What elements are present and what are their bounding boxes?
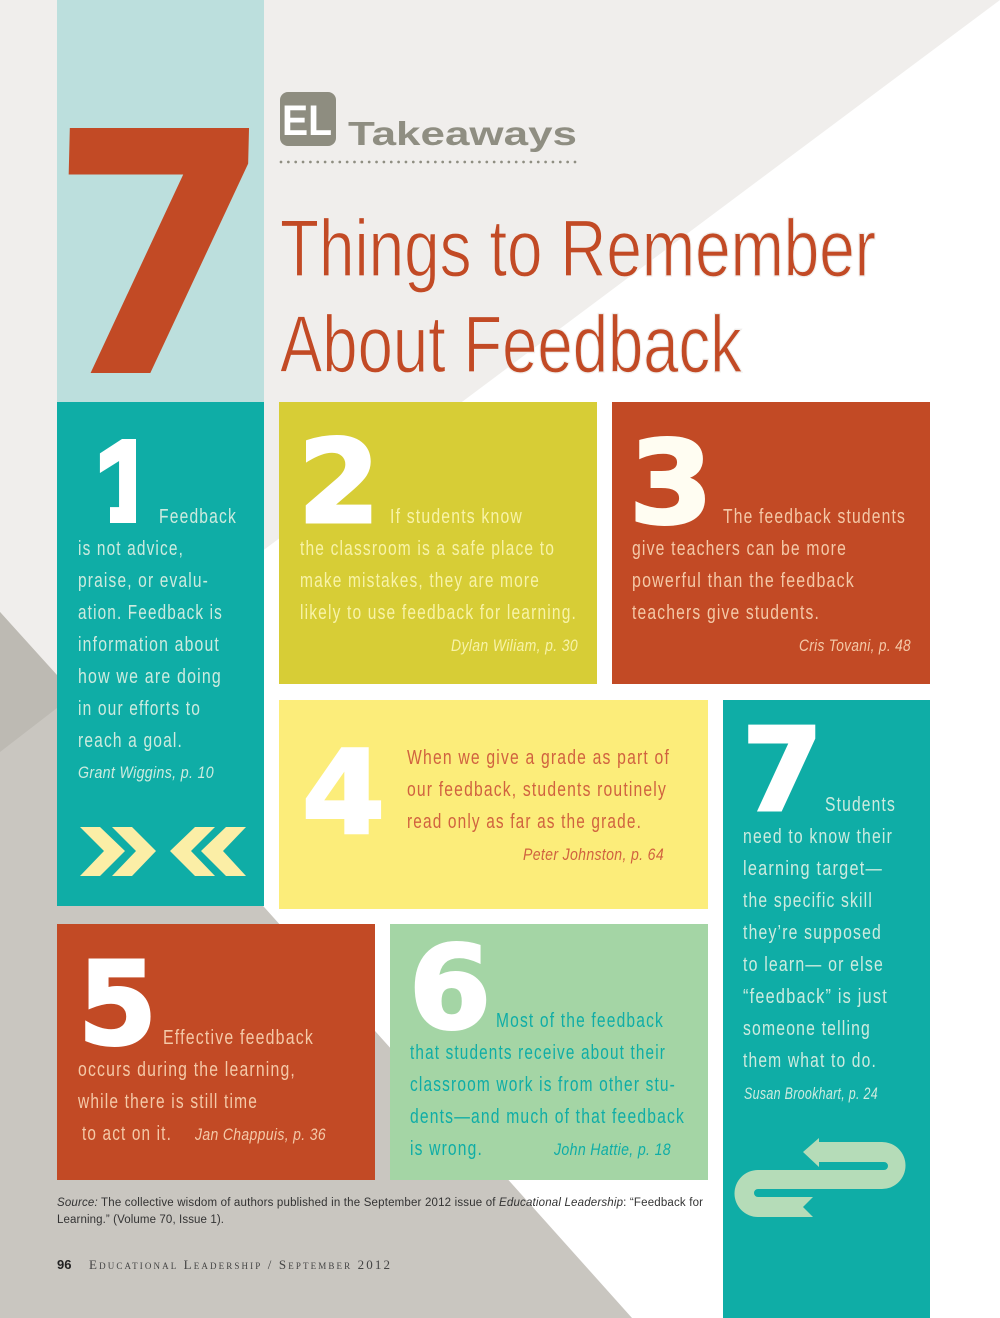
panel: takeaway 4: Peter Johnston, p. 64 xyxy=(523,845,664,864)
icon: converging chevrons xyxy=(80,827,246,876)
panel: takeaway 1: reach a goal. xyxy=(78,730,183,752)
panel: takeaway 1: information about xyxy=(78,634,220,656)
panel: takeaway 3: Cris Tovani, p. 48 xyxy=(799,636,911,655)
panel: takeaway 1 xyxy=(57,402,264,906)
logo: EL Takeaways xyxy=(280,92,577,162)
panel: takeaway 7: to learn— or else xyxy=(743,954,884,976)
title xyxy=(280,204,876,390)
panel: takeaway 5: Jan Chappuis, p. 36 xyxy=(194,1125,326,1144)
panel: takeaway 2: If students know xyxy=(390,506,523,528)
panel: takeaway 5: occurs during the learning, xyxy=(78,1059,296,1081)
panel: takeaway 2: 2 xyxy=(298,416,380,550)
panel: takeaway 7: them what to do. xyxy=(743,1050,877,1072)
title: About Feedback xyxy=(280,300,742,390)
panel: takeaway 4: When we give a grade as part of xyxy=(407,747,670,769)
panel: takeaway 7 xyxy=(723,700,930,1318)
panel: takeaway 3: The feedback students xyxy=(723,506,906,528)
large numeral 7: 7 xyxy=(40,62,277,453)
panel: takeaway 7: they’re supposed xyxy=(743,922,882,944)
panel: takeaway 7: Susan Brookhart, p. 24 xyxy=(744,1084,878,1103)
panel: takeaway 1: ation. Feedback is xyxy=(78,602,223,624)
source note xyxy=(57,1197,703,1226)
panel: takeaway 5: Effective feedback xyxy=(163,1027,314,1049)
panel: takeaway 1: Grant Wiggins, p. 10 xyxy=(78,763,214,782)
logo: EL Takeaways: EL xyxy=(282,97,332,145)
panel: takeaway 7: the specific skill xyxy=(743,890,873,912)
panel: takeaway 2 xyxy=(279,402,597,684)
panel: takeaway 4: read only as far as the grade. xyxy=(407,811,642,833)
panel: takeaway 7: Students xyxy=(825,794,896,816)
panel: takeaway 2: likely to use feedback for learning. xyxy=(300,602,577,624)
panel: takeaway 4: 4 xyxy=(302,727,385,861)
panel: takeaway 6: Most of the feedback xyxy=(496,1010,664,1032)
panel: takeaway 1: in our efforts to xyxy=(78,698,201,720)
panel: takeaway 5: while there is still time xyxy=(77,1091,258,1113)
panel: takeaway 3: powerful than the feedback xyxy=(632,570,855,592)
panel: takeaway 1: 1 xyxy=(95,417,160,547)
panel: takeaway 1: is not advice, xyxy=(78,538,184,560)
panel: takeaway 6 xyxy=(390,922,708,1180)
panel: takeaway 6: dents—and much of that feedback xyxy=(410,1106,685,1128)
panel: takeaway 3: 3 xyxy=(629,417,713,551)
page footer: Educational Leadership / September 2012 xyxy=(89,1257,390,1272)
panel: takeaway 7: need to know their xyxy=(743,826,893,848)
panel: takeaway 1: Feedback xyxy=(159,506,237,528)
panel: takeaway 2: Dylan Wiliam, p. 30 xyxy=(451,636,578,655)
panel: takeaway 5: to act on it. xyxy=(82,1123,172,1145)
panel: takeaway 4: our feedback, students routinely xyxy=(407,779,667,801)
logo: EL Takeaways: Takeaways xyxy=(348,115,577,152)
panel: takeaway 3: give teachers can be more xyxy=(632,538,847,560)
panel: takeaway 6: that students receive about their xyxy=(410,1042,666,1064)
panel: takeaway 2: the classroom is a safe place to xyxy=(300,538,555,560)
panel: takeaway 3: teachers give students. xyxy=(632,602,820,624)
panel: takeaway 6: is wrong. xyxy=(410,1138,483,1160)
panel: takeaway 4 xyxy=(279,700,708,909)
panel: takeaway 7: “feedback” is just xyxy=(743,986,888,1008)
panel: takeaway 7: 7 xyxy=(742,704,823,838)
panel: takeaway 1: how we are doing xyxy=(78,666,222,688)
panel: takeaway 2: make mistakes, they are more xyxy=(300,570,540,592)
panel: takeaway 6: classroom work is from other stu- xyxy=(410,1074,676,1096)
source note: Source: The collective wisdom of authors published in the September 2012 issue of Educational Leadership: “Feedback for xyxy=(57,1197,703,1209)
panel: takeaway 3 xyxy=(612,402,930,684)
panel: takeaway 7: someone telling xyxy=(743,1018,871,1040)
panel: takeaway 5 xyxy=(57,924,375,1180)
panel: takeaway 6: 6 xyxy=(409,922,491,1056)
panel: takeaway 5: 5 xyxy=(78,938,157,1072)
icon: looping arrow xyxy=(734,1138,906,1217)
panel: takeaway 1: praise, or evalu- xyxy=(78,570,209,592)
page footer: 96 xyxy=(57,1257,71,1272)
panel: takeaway 7: learning target— xyxy=(743,858,883,880)
source note: Learning.” (Volume 70, Issue 1). xyxy=(57,1214,224,1226)
panel: takeaway 6: John Hattie, p. 18 xyxy=(553,1140,671,1159)
